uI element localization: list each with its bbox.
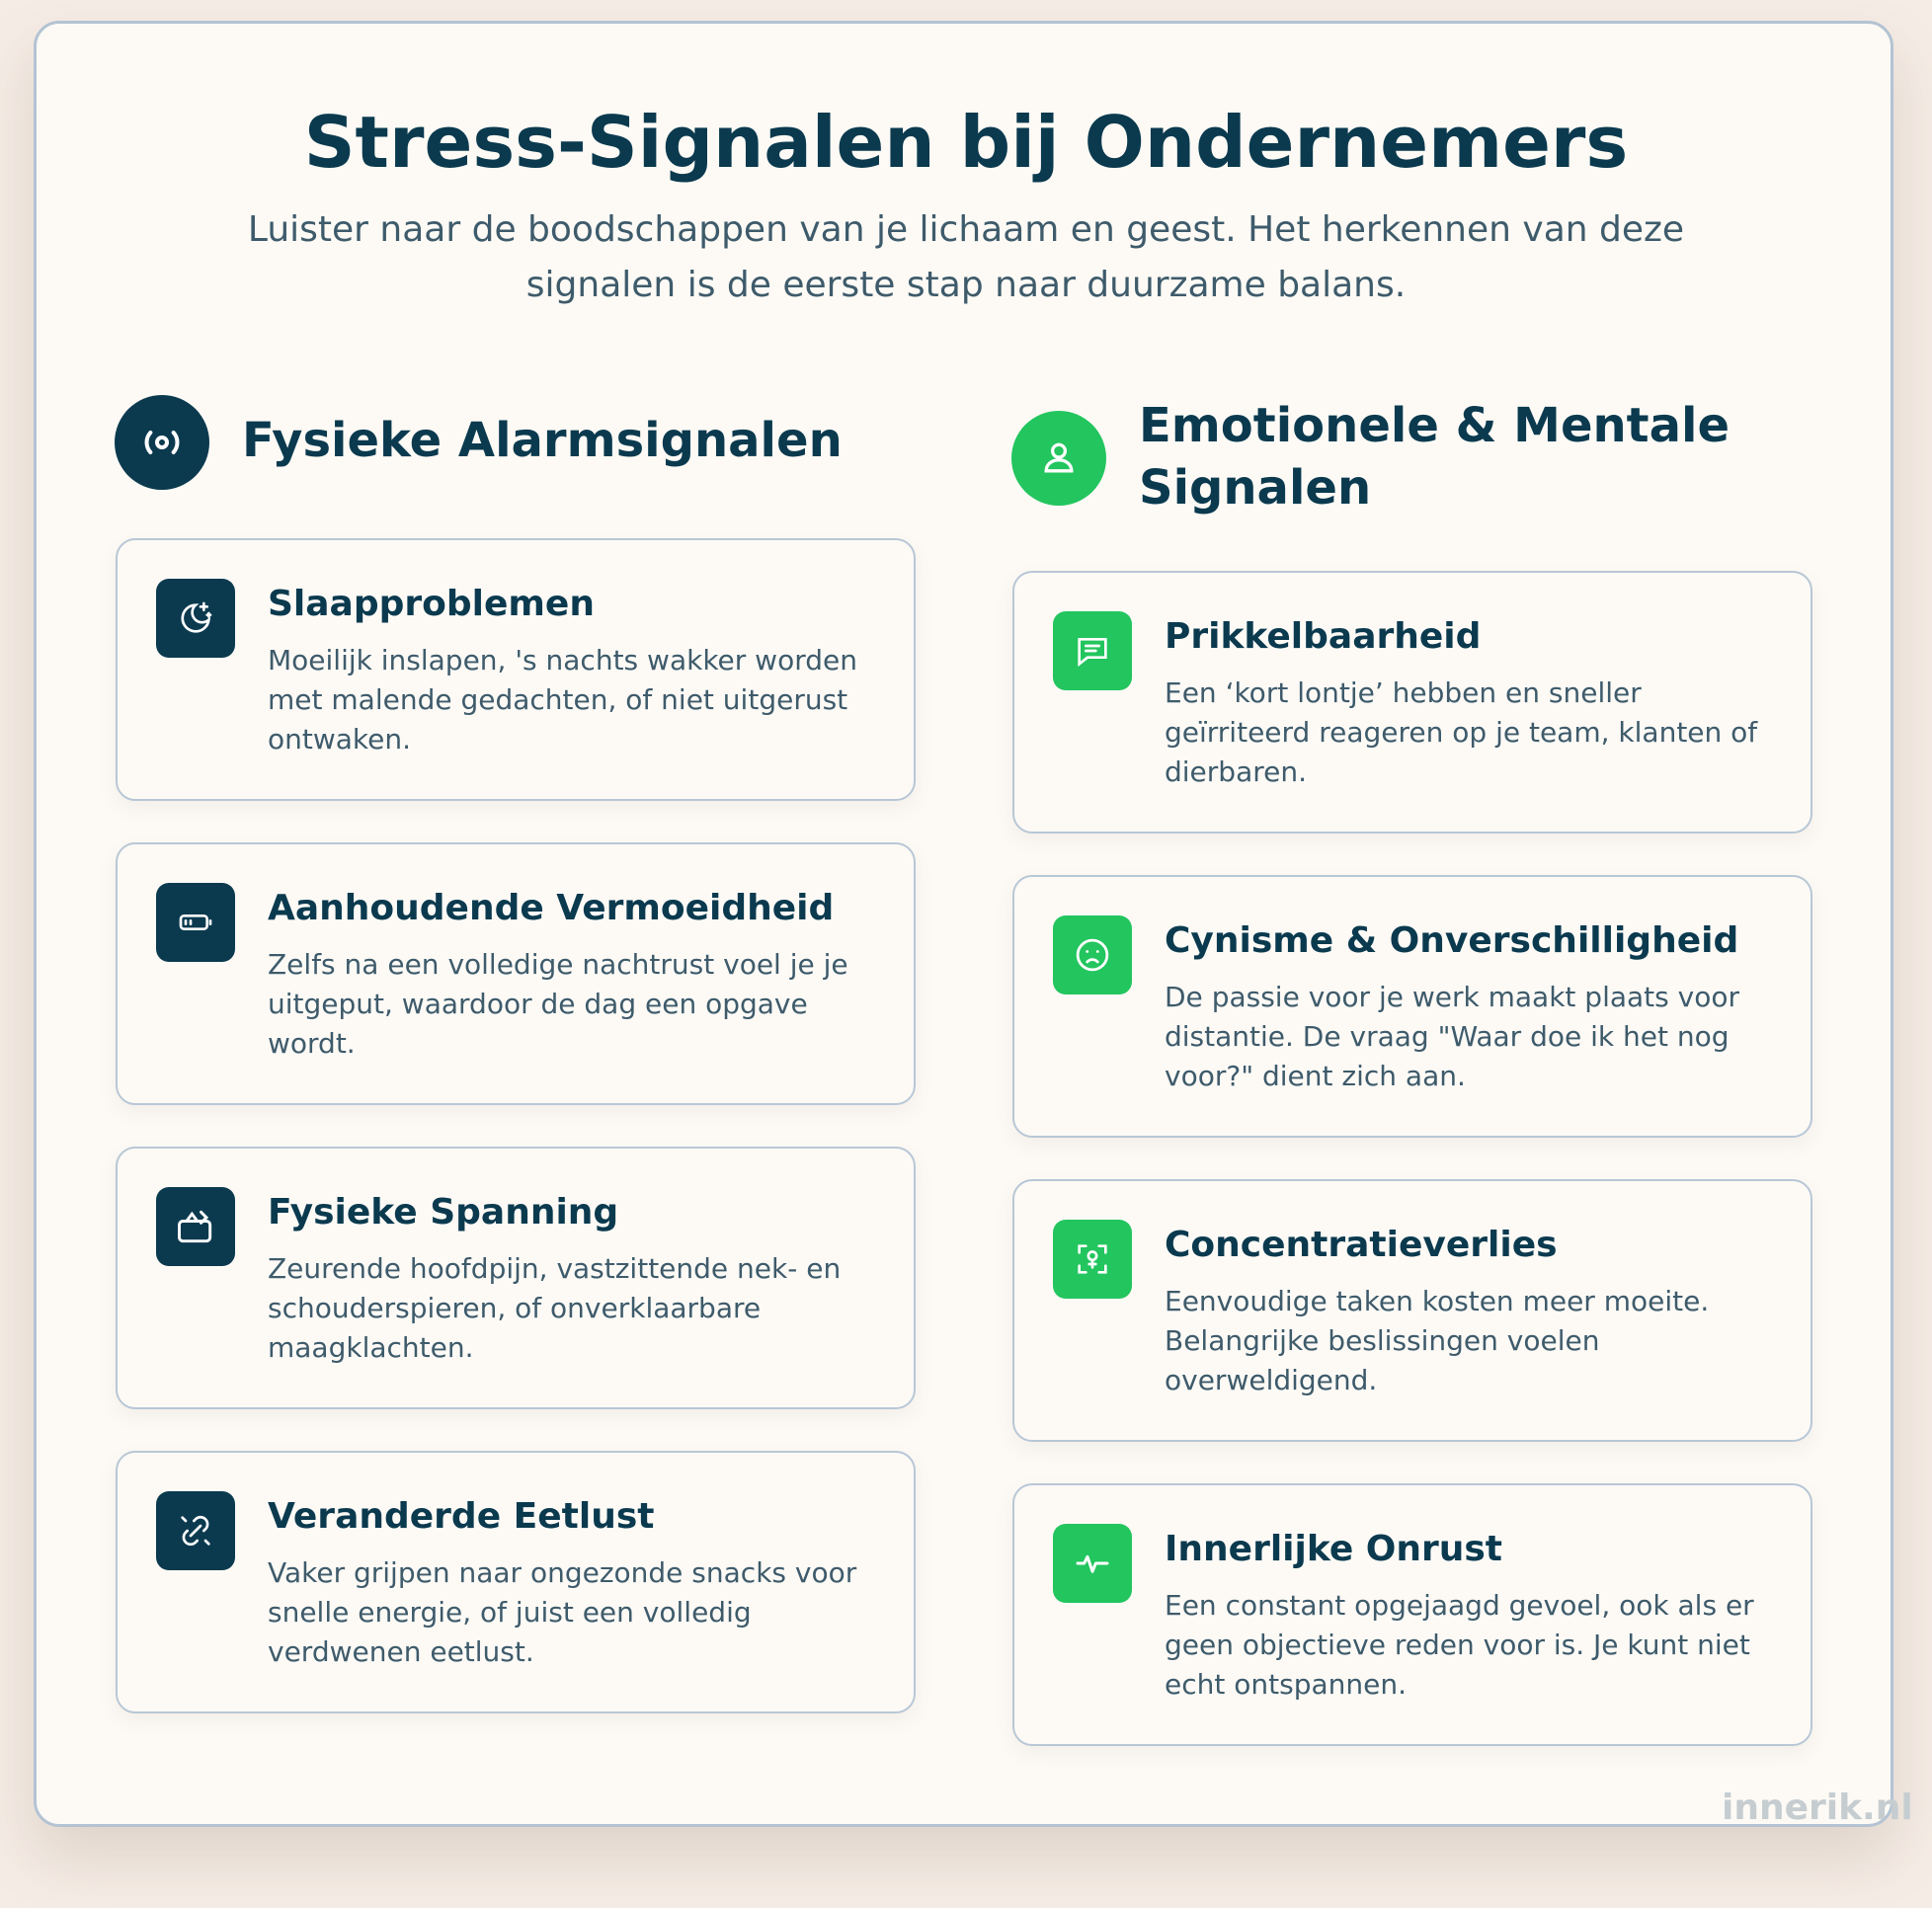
heading: physical: Fysieke Alarmsignalen [242,413,843,468]
card: Prikkelbaarheid [1012,571,1812,834]
icon: person [1011,411,1106,506]
card: Prikkelbaarheid: Een ‘kort lontje’ hebben en sneller geïrriteerd reageren op je team, klanten of dierbaren. [1165,676,1757,788]
card: Concentratieverlies: Eenvoudige taken kosten meer moeite. Belangrijke beslissingen voelen overweldigend. [1165,1285,1709,1396]
heading: emotional: Signalen [1139,460,1371,516]
card: Prikkelbaarheid: Prikkelbaarheid [1165,616,1481,657]
card: Spanning: Zeurende hoofdpijn, vastzittende nek- en schouderspieren, of onverklaarbare maagklachten. [268,1252,841,1364]
subtitle: Luister naar de boodschappen van je lichaam en geest. Het herkennen van deze signalen is de eerste stap naar duurzame balans. [248,209,1684,305]
heading: emotional: Emotionele & Mentale [1139,398,1730,453]
card: Concentratieverlies: Concentratieverlies [1165,1225,1558,1265]
card: Eetlust: Veranderde Eetlust [268,1496,654,1537]
card: Onrust: Innerlijke Onrust [1165,1529,1502,1569]
card: Cynisme: De passie voor je werk maakt plaats voor distantie. De vraag "Waar doe ik het nog voor?" dient zich aan. [1165,981,1739,1092]
card: Concentratieverlies [1012,1179,1812,1442]
card: Vermoeidheid: Zelfs na een volledige nachtrust voel je je uitgeput, waardoor de dag een opgave wordt. [268,948,848,1060]
card: Eetlust [116,1451,916,1713]
card: Cynisme: Cynisme & Onverschilligheid [1165,920,1738,961]
card: Spanning [116,1147,916,1409]
title: Stress-Signalen bij Ondernemers [304,101,1628,184]
card: Vermoeidheid [116,842,916,1105]
card: Slaapproblemen: Moeilijk inslapen, 's nachts wakker worden met malende gedachten, of niet uitgerust ontwaken. [268,644,857,755]
card: Eetlust: Vaker grijpen naar ongezonde snacks voor snelle energie, of juist een volledig verdwenen eetlust. [268,1556,856,1668]
card: Slaapproblemen: Slaapproblemen [268,584,595,624]
card: Onrust: Een constant opgejaagd gevoel, ook als er geen objectieve reden voor is. Je kunt niet echt ontspannen. [1165,1589,1754,1701]
card: Onrust [1012,1483,1812,1746]
card: Cynisme [1012,875,1812,1138]
heading: emotional [1139,398,1730,516]
watermark: innerik.nl [1722,1788,1913,1828]
card: Vermoeidheid: Aanhoudende Vermoeidheid [268,888,834,928]
icon: alarm [115,395,209,490]
card: Spanning: Fysieke Spanning [268,1192,618,1232]
card: Slaapproblemen [116,538,916,801]
